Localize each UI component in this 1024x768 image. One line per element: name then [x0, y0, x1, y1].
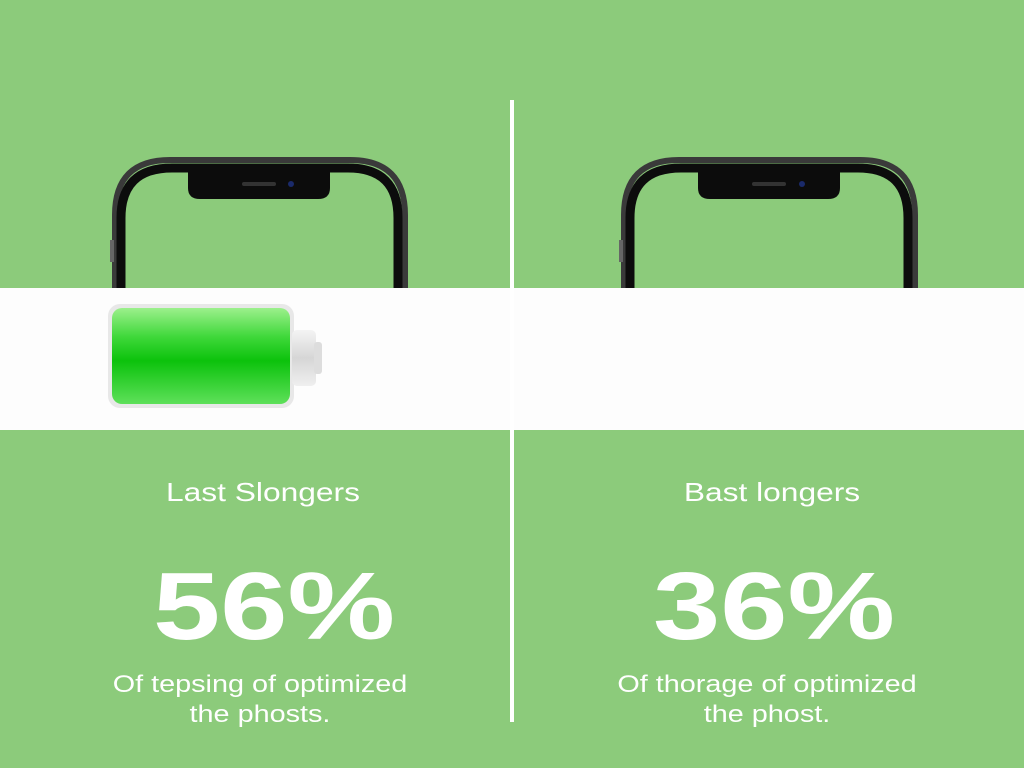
- phone: left: [110, 160, 405, 290]
- description: left: Of tepsing of optimized: [113, 671, 407, 698]
- description: left: [113, 671, 407, 728]
- stat: left: 56%: [153, 553, 395, 660]
- description: left: the phosts.: [190, 701, 330, 728]
- phone: right: [619, 160, 915, 290]
- stat: right: 36%: [653, 553, 895, 660]
- description: right: [617, 671, 917, 728]
- white band: [0, 288, 1024, 430]
- description: right: Of thorage of optimized: [617, 671, 917, 698]
- heading: right: Bast longers: [684, 477, 860, 507]
- divider line: [510, 100, 514, 722]
- icon: battery: [108, 304, 322, 408]
- heading: left: Last Slongers: [166, 477, 360, 507]
- description: right: the phost.: [704, 701, 830, 728]
